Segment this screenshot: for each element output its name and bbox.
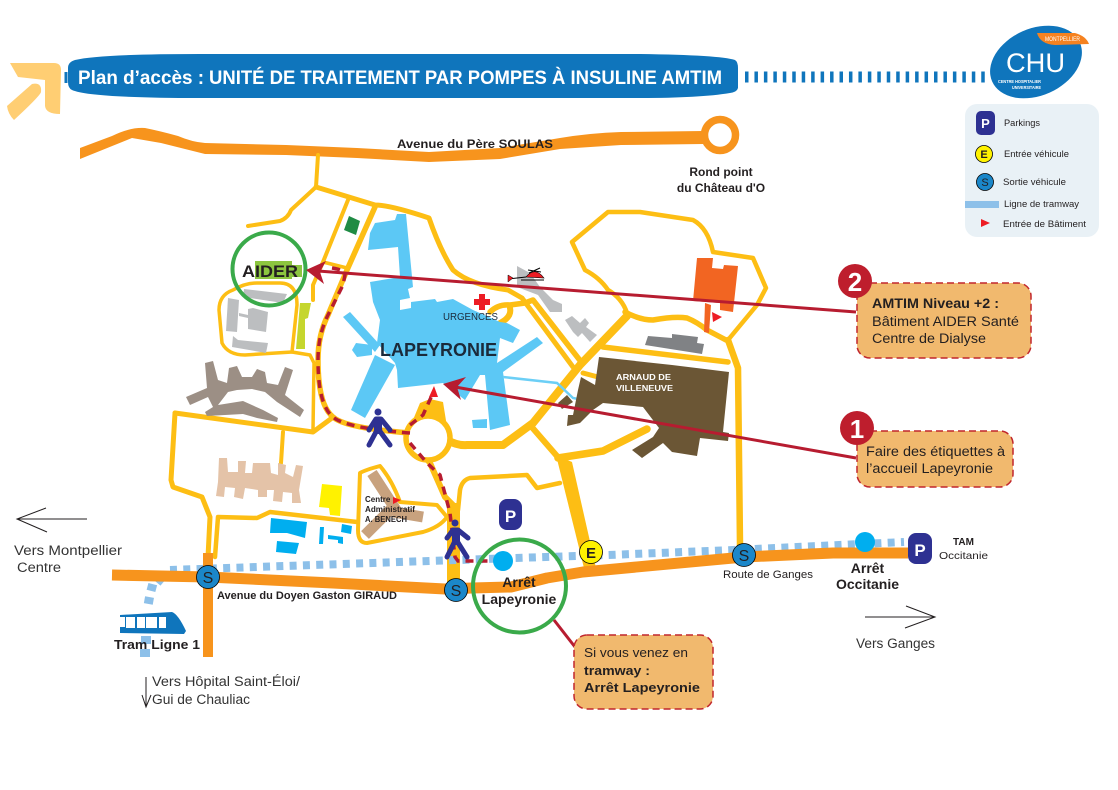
label: Arrêt Lapeyronie: Lapeyronie <box>482 591 557 607</box>
title banner <box>64 54 738 98</box>
buildings: grey AIDER group <box>226 289 287 353</box>
logo: CHU Montpellier: CENTRE HOSPITALIER <box>998 79 1042 84</box>
direction: Vers Ganges: Vers Ganges <box>856 636 935 651</box>
building: Arnaud de Villeneuve <box>558 357 729 458</box>
entrance E <box>580 540 602 564</box>
legend: parkings: P <box>981 116 990 131</box>
label: Tram Ligne 1: Tram Ligne 1 <box>114 637 200 652</box>
callout 1: étiquettes: Faire des étiquettes à <box>866 444 1006 459</box>
building: Centre Administratif A. Benech: Administratif <box>365 505 415 514</box>
parking: Lapeyronie <box>499 499 522 530</box>
pedestrian 2 <box>447 520 468 557</box>
pedestrian 1 <box>369 408 390 445</box>
callout: tramway: Si vous venez en <box>584 645 688 660</box>
label: Aider: AIDER <box>242 262 298 281</box>
label: Arrêt Occitanie: Arrêt <box>851 560 885 576</box>
building: yellow <box>319 484 342 516</box>
campus roads <box>171 155 766 588</box>
buildings: bright blue <box>270 518 352 554</box>
arrow: step 1 to Lapeyronie <box>443 377 856 458</box>
logo: CHU Montpellier: MONTPELLIER <box>1045 37 1081 43</box>
connector to Arnaud de Villeneuve <box>503 377 583 400</box>
legend panel <box>965 104 1099 237</box>
building: dark green <box>344 216 360 235</box>
label: Arrêt Occitanie: Occitanie <box>836 576 899 592</box>
logo: CHU Montpellier: UNIVERSITAIRE <box>1012 85 1041 90</box>
building: Centre Administratif A. Benech: A. BENECH <box>365 515 407 524</box>
building: Arnaud de Villeneuve: ARNAUD DE <box>616 373 672 382</box>
exit S: Giraud west: S <box>203 570 213 587</box>
building: lime <box>296 303 311 349</box>
highlight circle: AIDER <box>232 232 306 306</box>
exit S: Route de Ganges <box>732 544 756 566</box>
callout 1: étiquettes: l’accueil Lapeyronie <box>866 461 993 476</box>
building: taupe <box>186 361 304 422</box>
logo: CHU Montpellier <box>979 12 1093 112</box>
label: Arrêt Occitanie <box>836 560 899 592</box>
callout 1: étiquettes <box>840 411 1013 487</box>
main road: Giraud and Route de Ganges <box>112 553 908 657</box>
tram stop: Occitanie <box>855 532 875 552</box>
building: Centre Administratif A. Benech: Centre <box>365 495 391 504</box>
callout 2: AMTIM niveau +2: Centre de Dialyse <box>872 331 986 346</box>
legend: ligne de tramway: Ligne de tramway <box>1004 199 1080 209</box>
direction: Vers Montpellier Centre: Vers Montpellier <box>14 543 123 558</box>
label: Urgences: URGENCES <box>443 312 498 323</box>
exit S: Lapeyronie: S <box>451 583 461 600</box>
tramway line <box>140 542 904 657</box>
label: Avenue du Père Soulas: Avenue du Père SOULAS <box>397 137 553 151</box>
callout: tramway: Arrêt Lapeyronie <box>584 680 700 695</box>
building: Centre Administratif A. Benech <box>365 473 423 535</box>
building: Arnaud de Villeneuve: VILLENEUVE <box>616 384 674 393</box>
label: Rond point du Château d'O <box>677 165 765 195</box>
dotted title rule <box>745 72 986 82</box>
callout 2: AMTIM niveau +2: AMTIM Niveau +2 : <box>872 295 999 311</box>
icon: helicopter <box>508 268 544 282</box>
callout: tramway <box>574 635 713 709</box>
callout 1: étiquettes: 1 <box>850 414 864 444</box>
direction: Vers Montpellier Centre: Centre <box>17 560 61 575</box>
entrance E: E <box>586 545 596 562</box>
direction: Vers Montpellier Centre <box>14 508 123 575</box>
label: Rond point du Château d'O: du Château d'O <box>677 181 765 195</box>
legend: entrée de bâtiment: Entrée de Bâtiment <box>1003 219 1087 229</box>
label: TAM Occitanie <box>939 537 988 562</box>
callout: tramway: tramway : <box>584 663 650 678</box>
label: Avenue du Doyen Gaston Giraud: Avenue du Doyen Gaston GIRAUD <box>217 590 397 602</box>
direction: Vers Ganges <box>856 606 935 651</box>
helipad zone <box>517 266 597 342</box>
direction: Vers Hôpital Saint-Éloi: Gui de Chauliac <box>152 692 250 707</box>
building: beige <box>216 458 303 503</box>
legend: sortie véhicule: S <box>981 177 989 189</box>
logo: CHU Montpellier: CHU <box>1006 48 1065 78</box>
title banner: Plan d’accès : <box>78 68 204 89</box>
title banner: UNITÉ DE TRAITEMENT PAR POMPES À INSULINE AMTIM <box>209 67 722 89</box>
highlight circle: Arrêt Lapeyronie <box>473 540 566 632</box>
legend: parkings: Parkings <box>1004 118 1041 128</box>
legend: entrée véhicule: Entrée véhicule <box>1004 149 1069 159</box>
legend: parkings <box>976 111 1041 135</box>
building: orange pavilion <box>693 258 738 333</box>
callout 2: AMTIM niveau +2 <box>838 264 1031 358</box>
icon: corner arrow <box>7 63 61 120</box>
parking: TAM Occitanie: P <box>914 541 926 560</box>
label: Lapeyronie: LAPEYRONIE <box>380 340 497 360</box>
parking: Lapeyronie: P <box>505 507 516 526</box>
parking: TAM Occitanie <box>908 533 932 564</box>
exit S: Lapeyronie <box>444 578 468 602</box>
label: Arrêt Lapeyronie: Arrêt <box>502 574 536 590</box>
callout 2: AMTIM niveau +2: 2 <box>848 267 862 297</box>
legend: entrée véhicule: E <box>980 149 988 161</box>
label: Arrêt Lapeyronie <box>482 574 557 607</box>
callout 2: AMTIM niveau +2: Bâtiment AIDER Santé <box>872 314 1019 329</box>
legend: entrée véhicule <box>976 146 1069 162</box>
exit S: Giraud west <box>196 566 220 588</box>
legend: sortie véhicule: Sortie véhicule <box>1003 177 1066 187</box>
connector: tramway callout <box>554 620 575 647</box>
label: Rond point du Château d'O: Rond point <box>689 165 753 179</box>
direction: Vers Hôpital Saint-Éloi <box>142 674 300 707</box>
building: grey block <box>645 334 704 354</box>
building: Lapeyronie <box>343 214 543 430</box>
exit S: Route de Ganges: S <box>739 548 749 565</box>
direction: Vers Hôpital Saint-Éloi: Vers Hôpital Saint-Éloi/ <box>152 674 300 689</box>
tram stop: Lapeyronie <box>493 551 513 571</box>
icon: tram <box>120 612 186 634</box>
legend: sortie véhicule <box>976 174 1066 190</box>
avenue du Père Soulas road <box>80 120 736 162</box>
building: AIDER highlight <box>255 261 302 279</box>
route: pedestrian dashed path <box>318 268 493 561</box>
label: Route de Ganges: Route de Ganges <box>723 569 814 581</box>
label: TAM Occitanie: TAM <box>953 537 974 548</box>
label: TAM Occitanie: Occitanie <box>939 550 988 562</box>
arrow: step 2 to AIDER <box>306 261 856 312</box>
icon: red cross <box>474 294 490 310</box>
